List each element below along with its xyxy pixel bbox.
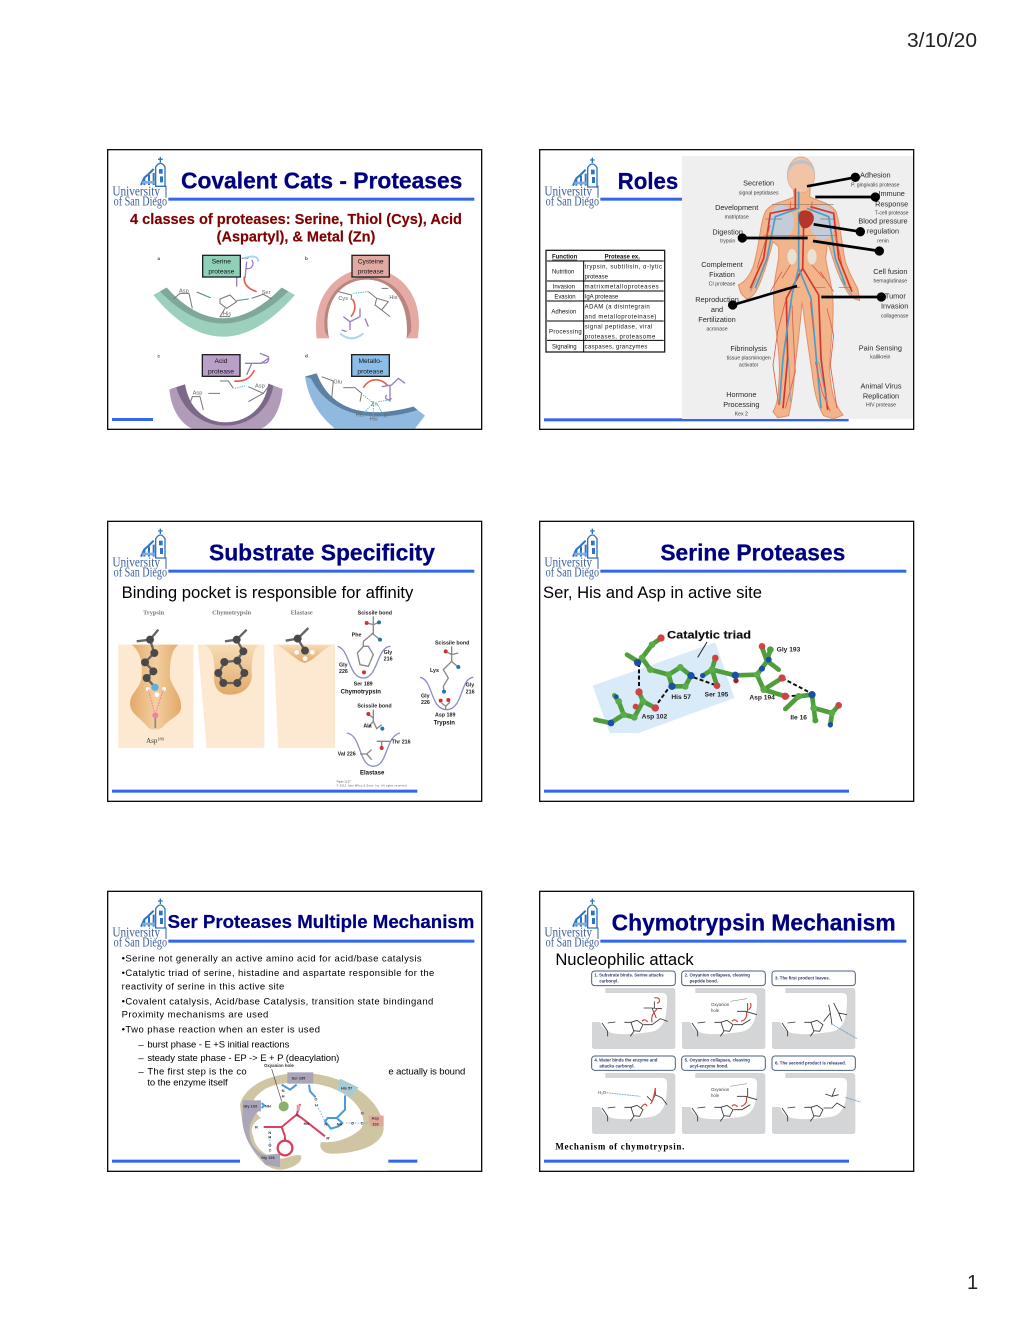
body diagram xyxy=(682,156,913,419)
left labels: activator xyxy=(739,363,759,369)
bullet text xyxy=(122,953,465,1089)
panel b: cysteine protease: protease xyxy=(358,269,384,276)
right labels: Animal Virus xyxy=(860,381,902,390)
panel a: serine protease: His xyxy=(223,312,231,318)
function table: Function xyxy=(552,255,578,261)
panel b: cysteine protease xyxy=(305,255,419,338)
catalytic triad structure xyxy=(593,630,842,733)
function table: Protease ex. xyxy=(605,255,640,261)
step 5: acyl-enzyme bond. xyxy=(690,1063,728,1068)
residue labels: Gly 193 xyxy=(777,646,801,653)
university logo xyxy=(112,157,167,208)
subtitle xyxy=(130,212,462,245)
function table: proteases, proteasome xyxy=(585,335,656,341)
panel a: serine protease: Asp xyxy=(179,288,189,294)
footer bar xyxy=(544,418,849,421)
left labels: tissue plasminogen xyxy=(727,355,771,361)
atom labels: R' xyxy=(326,1136,330,1141)
body silhouette xyxy=(738,187,860,419)
left labels: Kex 2 xyxy=(735,412,748,418)
chart: chymotrypsin schematic: 226 xyxy=(339,669,348,675)
university logo: of San Diego xyxy=(114,935,167,950)
panel c: acid protease: Asp xyxy=(193,390,202,396)
atom labels: R xyxy=(255,1125,258,1130)
panel c: acid protease: c xyxy=(157,353,160,358)
chart: chymotrypsin schematic: Chymotrypsin xyxy=(341,689,381,695)
panel b: cysteine protease: Cysteine xyxy=(358,259,384,266)
step 6 xyxy=(772,1056,860,1134)
left labels: Secretion xyxy=(743,179,774,188)
oxygen atoms xyxy=(633,634,842,712)
left labels: Processing xyxy=(723,400,759,409)
atom labels: C xyxy=(269,1147,272,1152)
chart: trypsin schematic: Scissile bond xyxy=(435,641,469,647)
footer bar xyxy=(112,418,153,421)
left labels: Fixation xyxy=(709,270,735,279)
bullet text: burst phase - E +S initial reactions xyxy=(147,1039,290,1050)
title rule xyxy=(168,940,474,943)
vessels xyxy=(750,188,852,410)
panel d: metalloprotease: Zn xyxy=(371,401,378,407)
left labels: signal peptidases xyxy=(739,190,779,196)
atom labels: NH xyxy=(337,1121,343,1126)
panel a: serine protease xyxy=(153,255,295,337)
chart: trypsin schematic: 226 xyxy=(421,700,430,706)
title: Ser Proteases Multiple Mechanism xyxy=(168,911,474,932)
panel b: cysteine protease: b xyxy=(305,256,308,261)
left labels: Development xyxy=(715,203,758,212)
title rule xyxy=(600,570,906,573)
step 5 xyxy=(682,1056,765,1134)
atom labels: N xyxy=(324,1121,327,1126)
function table: Evasion xyxy=(554,295,576,301)
bullet text: Proximity mechanisms are used xyxy=(122,1010,268,1021)
left labels: acronase xyxy=(706,326,728,332)
title: Substrate Specificity xyxy=(209,539,435,565)
atom labels: H xyxy=(268,1135,271,1140)
oxyanion hole mechanism diagram: Oxyanion hole xyxy=(264,1063,294,1068)
university logo: University xyxy=(544,925,592,940)
function table: Invasion xyxy=(553,285,575,291)
atom labels: N xyxy=(268,1130,271,1135)
slide frame xyxy=(108,891,482,1171)
atom labels: C xyxy=(296,1112,299,1117)
function table: trypsin, subtilisin, α-lytic xyxy=(585,265,662,271)
pocket: trypsin: Trypsin xyxy=(143,609,165,616)
residue labels: Ser 195 xyxy=(705,691,729,698)
chart: trypsin schematic: Gly xyxy=(421,694,430,700)
right labels: Pain Sensing xyxy=(859,343,902,352)
chart: trypsin schematic: Gly xyxy=(466,683,474,689)
left labels: Fibrinolysis xyxy=(730,344,767,353)
panel d: metalloprotease: Glu xyxy=(333,379,342,385)
pocket: chymotrypsin xyxy=(198,609,264,748)
right labels: Tumor xyxy=(885,292,906,301)
right labels xyxy=(851,171,909,409)
body text: Nucleophilic attack xyxy=(555,951,695,969)
title: Covalent Cats - Proteases xyxy=(181,167,462,193)
function table: and metalloproteinase) xyxy=(585,315,656,321)
figure caption: Mechanism of chymotrypsin. xyxy=(555,1142,684,1152)
panel c: acid protease xyxy=(157,353,283,429)
step 4: attacks carbonyl. xyxy=(599,1063,635,1068)
step 2: hole xyxy=(711,1008,720,1013)
panel a: serine protease: Serine xyxy=(212,259,231,266)
oxyanion hole mechanism diagram: 102 xyxy=(372,1122,379,1126)
chart: trypsin schematic xyxy=(420,641,475,727)
slide: Substrate Specificity xyxy=(108,521,482,801)
left labels: matriptase xyxy=(725,214,749,220)
function table: caspases, granzymes xyxy=(585,344,647,350)
university logo: University xyxy=(544,555,592,570)
footer bar xyxy=(112,790,417,793)
chart: chymotrypsin schematic: Ser 189 xyxy=(354,682,373,688)
right labels: renin xyxy=(877,238,889,244)
oxyanion hole mechanism diagram: Ser 195 xyxy=(292,1076,306,1080)
atom labels: C xyxy=(361,1121,364,1126)
university logo: University xyxy=(112,555,160,570)
right labels: Cell fusion xyxy=(873,267,907,276)
panel d: metalloprotease: X xyxy=(383,414,387,420)
function table: matrixmetalloproteases xyxy=(585,285,659,291)
right labels: Response xyxy=(875,199,908,208)
function table: Signaling xyxy=(552,344,577,350)
bullet text: The first step is the co xyxy=(147,1066,247,1077)
organs xyxy=(769,205,794,240)
catalytic triad structure: Catalytic triad xyxy=(667,630,751,642)
university logo: of San Diego xyxy=(546,193,599,208)
function table: signal peptidase, viral xyxy=(585,325,652,331)
page number: 1 xyxy=(967,1272,978,1294)
step 4: H₂O xyxy=(598,1090,607,1095)
chart: elastase schematic: © 2013 John Wiley & Sons, Inc. All rights reserved. xyxy=(337,785,408,788)
oxyanion hole mechanism diagram: Gly 193 xyxy=(261,1156,275,1160)
step 6: 6. The second product is released. xyxy=(775,1060,846,1065)
bullet text: – xyxy=(138,1066,144,1077)
title rule xyxy=(168,570,474,573)
chart: chymotrypsin schematic: Gly xyxy=(384,650,392,656)
right labels: T-cell protease xyxy=(875,210,909,216)
university logo xyxy=(112,529,167,580)
panel a: serine protease: protease xyxy=(208,269,235,276)
step 5: hole xyxy=(711,1093,720,1098)
atom labels: H xyxy=(315,1102,318,1107)
chart: elastase schematic: Scissile bond xyxy=(357,704,392,710)
right labels: HIV protease xyxy=(866,403,896,409)
bullet text: – xyxy=(138,1039,144,1050)
title rule xyxy=(600,198,906,201)
footer bar xyxy=(544,790,849,793)
residue labels: His 57 xyxy=(671,694,691,701)
panel d: metalloprotease: d xyxy=(305,353,308,358)
slide: Ser Proteases Multiple Mechanism xyxy=(108,891,482,1171)
university logo: University xyxy=(544,183,592,198)
panel d: metalloprotease xyxy=(305,353,425,429)
slide frame xyxy=(540,150,914,429)
atom labels: O xyxy=(351,1121,354,1126)
title rule xyxy=(600,940,906,943)
university logo xyxy=(544,899,599,950)
pocket: chymotrypsin: Chymotrypsin xyxy=(212,609,252,616)
title: Roles xyxy=(618,168,678,194)
title rule xyxy=(168,198,474,201)
panel d: metalloprotease: Metallo- xyxy=(358,358,382,365)
bullet text: e actually is bound xyxy=(388,1066,465,1077)
pocket: elastase: Elastase xyxy=(291,609,313,616)
step 2: Oxyanion xyxy=(711,1002,730,1007)
left labels: Complement xyxy=(701,260,743,269)
red substrate bonds xyxy=(264,1104,325,1136)
right labels: Invasion xyxy=(881,302,908,311)
right labels: collagenase xyxy=(881,313,909,319)
function table: ADAM (a disintegrain xyxy=(585,305,650,311)
body text: Binding pocket is responsible for affinity xyxy=(122,584,414,602)
atom labels: O xyxy=(361,1111,364,1116)
function table: Adhesion xyxy=(551,310,576,316)
residue labels: Asp 102 xyxy=(642,713,667,720)
carbon atoms xyxy=(615,641,835,721)
panel d: metalloprotease: His xyxy=(356,412,364,418)
right labels: regulation xyxy=(867,227,899,236)
university logo: of San Diego xyxy=(546,935,599,950)
university logo: of San Diego xyxy=(114,565,167,580)
title: Chymotrypsin Mechanism xyxy=(612,909,896,935)
left labels: Reproduction xyxy=(695,295,739,304)
nitrogen atoms xyxy=(608,657,833,727)
subtitle: 4 classes of proteases: Serine, Thiol (Cys), Acid xyxy=(130,212,462,228)
oxyanion hole mechanism diagram: Asp xyxy=(372,1117,380,1121)
panel a: serine protease: Ser xyxy=(262,290,271,296)
bullet text: to the enzyme itself xyxy=(147,1078,228,1089)
step 5: Oxyanion xyxy=(711,1087,730,1092)
atom labels: O xyxy=(314,1096,317,1101)
bullet text: •Covalent catalysis, Acid/base Catalysis, transition state bindingand xyxy=(122,996,433,1007)
footer bar xyxy=(544,1160,849,1163)
function table: protease xyxy=(585,275,609,281)
blue enzyme bonds xyxy=(262,1085,345,1129)
panel c: acid protease: Acid xyxy=(215,358,228,365)
bullet text: reactivity of serine in this active site xyxy=(122,981,284,992)
oxyanion hole mechanism diagram xyxy=(240,1063,388,1171)
chart: trypsin schematic: Lys xyxy=(430,668,439,674)
function table xyxy=(546,250,665,352)
chart: elastase schematic: Thr 216 xyxy=(392,740,411,746)
function table: Processing xyxy=(549,330,582,336)
chart: chymotrypsin schematic: Scissile bond xyxy=(358,610,392,616)
pocket: trypsin: 189 xyxy=(157,737,164,742)
step 1: carbonyl. xyxy=(599,978,619,983)
chart: elastase schematic: Figure 11-27 xyxy=(337,781,351,784)
rib guide lines xyxy=(764,204,852,288)
university logo xyxy=(544,529,599,580)
atom labels: N xyxy=(282,1088,285,1093)
step 5: 5. Oxyanion collapses, cleaving xyxy=(685,1058,750,1063)
pocket: elastase xyxy=(273,609,335,748)
right labels: kallikrein xyxy=(870,355,890,361)
step 3 xyxy=(772,971,857,1049)
slide: Covalent Cats - Proteases xyxy=(108,150,482,429)
right labels: P. gingivalis protease xyxy=(851,182,900,188)
panel c: acid protease: protease xyxy=(208,369,234,376)
atom labels xyxy=(255,1088,364,1152)
university logo: of San Diego xyxy=(114,193,167,208)
right labels: Immune xyxy=(878,189,905,198)
slide frame xyxy=(108,150,482,429)
step 3: 3. The first product leaves. xyxy=(775,976,830,981)
bullet text: – xyxy=(138,1053,144,1064)
function table: Nutrition xyxy=(552,270,574,276)
bullet text: •Serine not generally an active amino acid for acid/base catalysis xyxy=(122,953,422,964)
right labels: Blood pressure xyxy=(858,217,908,226)
left labels: Fertilization xyxy=(698,315,736,324)
panel c: acid protease: Asp xyxy=(255,383,265,389)
university logo: of San Diego xyxy=(546,565,599,580)
date: 3/10/20 xyxy=(907,30,977,52)
atom labels: H xyxy=(282,1093,285,1098)
panel b: cysteine protease: Cys xyxy=(338,296,348,302)
bullet text: •Catalytic triad of serine, histadine and aspartate responsible for the xyxy=(122,968,434,979)
pointer lines xyxy=(729,174,885,308)
step 2 xyxy=(682,971,765,1049)
right labels: Adhesion xyxy=(860,171,891,180)
step 2: peptide bond. xyxy=(690,978,718,983)
footer bar xyxy=(112,1160,417,1163)
left labels: CI protease xyxy=(709,281,735,287)
chart: chymotrypsin schematic: Gly xyxy=(339,663,348,669)
subtitle: (Aspartyl), & Metal (Zn) xyxy=(217,229,376,245)
left labels: and xyxy=(711,305,723,314)
residue labels xyxy=(642,646,807,721)
panel d: metalloprotease: His xyxy=(370,416,378,422)
chart: elastase schematic: Ala xyxy=(363,724,372,730)
atom labels: HN xyxy=(304,1121,310,1126)
residue labels: Asp 194 xyxy=(749,695,775,702)
body text: Ser, His and Asp in active site xyxy=(543,584,762,602)
left labels: trypsin xyxy=(720,238,735,244)
chart: elastase schematic: Val 226 xyxy=(338,752,356,758)
oxyanion hole mechanism diagram: Gly 193 xyxy=(243,1105,257,1109)
chart: chymotrypsin schematic: Phe xyxy=(352,633,361,639)
bullet text: steady state phase - EP -> E + P (deacylation) xyxy=(147,1053,339,1064)
oxyanion hole mechanism diagram: His 57 xyxy=(341,1087,352,1091)
step 4 xyxy=(592,1056,675,1134)
panel b: cysteine protease: His xyxy=(389,295,398,301)
residue labels: Ile 16 xyxy=(790,714,807,721)
panel d: metalloprotease: protease xyxy=(357,369,384,376)
right labels: hemaglutinase xyxy=(874,279,907,285)
right labels: Replication xyxy=(863,391,899,400)
title: Serine Proteases xyxy=(660,539,845,565)
pocket: trypsin: Asp xyxy=(146,737,157,745)
slide: Roles xyxy=(540,150,914,429)
slide frame xyxy=(540,521,914,801)
chart: elastase schematic: Elastase xyxy=(360,770,385,776)
slide: Serine Proteases xyxy=(540,521,914,801)
left labels xyxy=(695,179,779,418)
step 1: 1. Substrate binds. Serine attacks xyxy=(594,973,664,978)
step 2: 2. Oxyanion collapses, cleaving xyxy=(685,973,750,978)
university logo xyxy=(544,158,599,208)
step 1 xyxy=(592,971,675,1049)
chart: trypsin schematic: Asp 189 xyxy=(435,713,455,719)
panel a: serine protease: a xyxy=(157,256,160,261)
left labels: Hormone xyxy=(726,390,756,399)
bullet text: •Two phase reaction when an ester is used xyxy=(122,1025,320,1036)
atom labels: O xyxy=(268,1142,271,1147)
slide frame xyxy=(108,521,482,801)
university logo: University xyxy=(112,925,160,940)
chart: chymotrypsin schematic xyxy=(338,610,393,695)
left labels: Digestion xyxy=(712,227,743,236)
slide frame xyxy=(540,891,914,1171)
chart: trypsin schematic: 216 xyxy=(466,689,475,695)
step 4: 4. Water binds the enzyme and xyxy=(594,1058,658,1063)
chart: chymotrypsin schematic: 216 xyxy=(384,657,393,663)
dashed hydrogen bonds xyxy=(639,663,812,708)
slide: Chymotrypsin Mechanism xyxy=(540,891,914,1171)
university logo xyxy=(112,899,167,950)
pocket: trypsin xyxy=(118,609,193,748)
function table: IgA protease xyxy=(585,295,619,301)
chart: elastase schematic xyxy=(337,704,411,788)
university logo: University xyxy=(112,183,160,198)
atom labels: NH xyxy=(265,1104,271,1109)
chart: trypsin schematic: Trypsin xyxy=(434,721,455,727)
green sticks xyxy=(595,638,839,725)
